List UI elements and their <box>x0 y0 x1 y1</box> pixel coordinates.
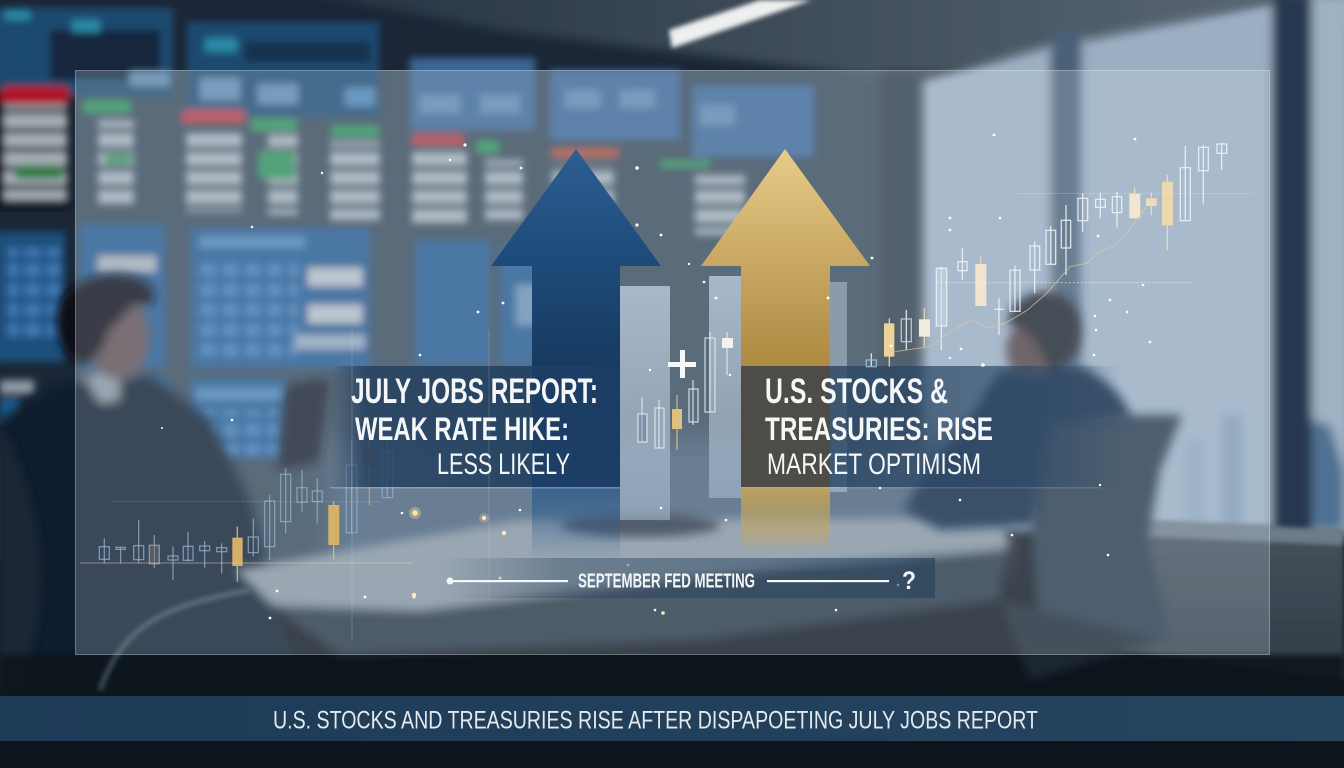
laptop on table <box>560 513 720 537</box>
left dim chair legs <box>100 590 250 690</box>
wall below window <box>1120 518 1344 680</box>
ceiling <box>240 0 1344 540</box>
arrow: gold up <box>701 149 870 552</box>
right panel heading: U.S. STOCKS & <box>765 372 948 411</box>
wall wash inside glass <box>75 70 905 570</box>
grid lines and sparkles <box>161 134 1151 640</box>
dark desk monitor <box>278 378 330 470</box>
text panel: left <box>330 366 620 488</box>
bottom title text: U.S. STOCKS AND TREASURIES RISE AFTER DISPAPOETING JULY JOBS REPORT <box>273 706 1038 734</box>
question mark: ? <box>902 567 916 595</box>
desk area wash <box>330 440 1000 570</box>
left panel subheading: LESS LIKELY <box>437 448 570 481</box>
ceiling light fixture <box>669 0 812 48</box>
left chair <box>0 430 41 690</box>
gold arrow faded lower shaft <box>741 487 830 552</box>
candlestick chart: left <box>80 440 413 582</box>
panel: glass overlay <box>75 70 1270 655</box>
glow points <box>409 507 489 523</box>
monitors wall <box>0 8 814 458</box>
timeline label: SEPTEMBER FED MEETING <box>578 570 755 592</box>
right person <box>905 292 1130 530</box>
table <box>235 518 1010 655</box>
bottom title band <box>0 696 1344 741</box>
lower row blue screens <box>0 232 65 362</box>
bottom floor dark <box>0 655 1344 768</box>
arrow: blue up <box>491 149 661 562</box>
blue arrow faded lower shaft <box>532 487 620 562</box>
text panel: right: TREASURIES: RISE <box>765 411 993 447</box>
back wall behind monitors <box>0 0 900 560</box>
right panel subheading: MARKET OPTIMISM <box>767 448 981 481</box>
text panel: right <box>741 366 1121 488</box>
timeline: September Fed meeting <box>440 558 935 598</box>
mid row data tables <box>0 90 70 208</box>
candlestick chart: middle <box>638 332 733 450</box>
right chair <box>1000 415 1182 680</box>
candlestick chart: right rising <box>866 143 1253 367</box>
top row screens <box>0 8 173 96</box>
text panel: left: WEAK RATE HIKE: <box>355 411 569 447</box>
left panel heading: JULY JOBS REPORT: <box>351 372 598 411</box>
office window <box>922 0 1344 535</box>
plus sign <box>668 350 696 378</box>
translucent light columns beside arrows <box>620 276 847 520</box>
left person <box>0 274 300 690</box>
